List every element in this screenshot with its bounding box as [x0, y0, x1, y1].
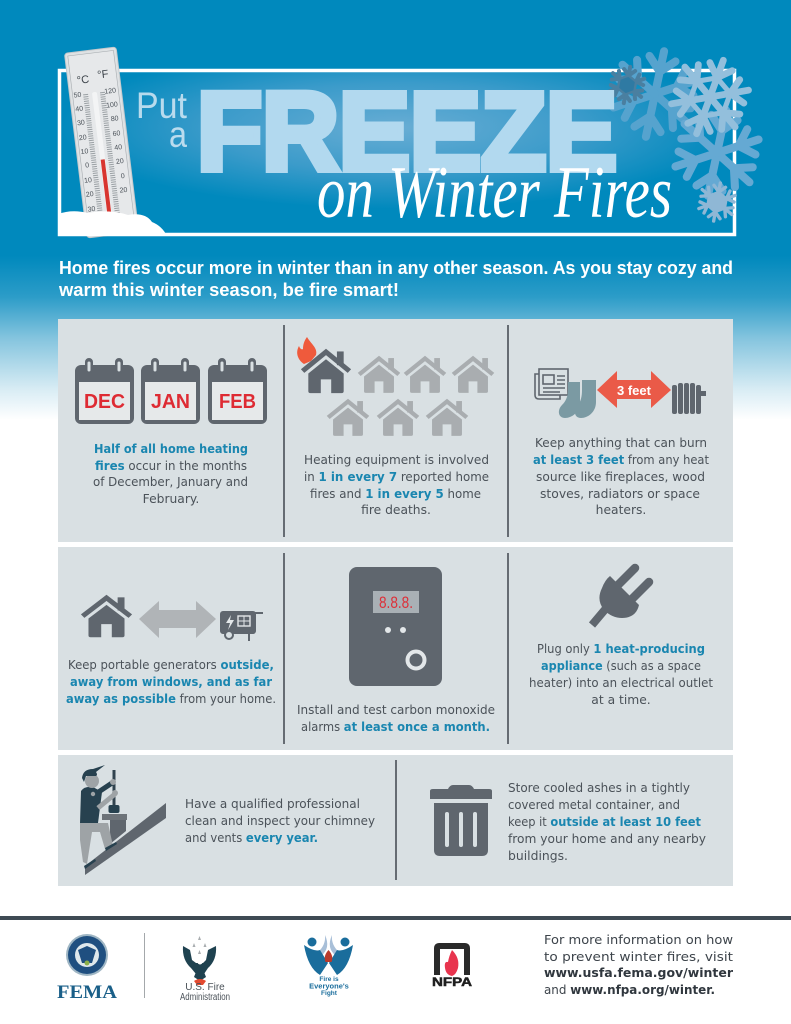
title: Put a: a — [169, 114, 187, 155]
text: heating months: of December, January and — [93, 475, 248, 489]
text: generators: Keep portable generators outside, — [68, 658, 274, 672]
icon: thermometer: 10 — [84, 177, 92, 185]
icon: calendars: FEB — [219, 391, 256, 413]
logo: U.S. Fire Administration: U.S. Fire — [185, 982, 225, 993]
panel: row 2 — [58, 547, 733, 750]
head and cap — [85, 774, 99, 788]
icon: house and generator — [83, 597, 263, 641]
icon: thermometer: 50 — [73, 92, 82, 100]
icon: plug — [592, 568, 649, 625]
footer text: For more information on how — [544, 933, 733, 947]
icon: thermometer: 20 — [85, 191, 94, 199]
text: ashes — [508, 781, 706, 863]
icon: calendars: JAN — [151, 391, 190, 413]
title: FREEZE: FREEZE — [197, 70, 617, 194]
icon: thermometer: °F — [97, 68, 109, 82]
icon: thermometer: 80 — [110, 115, 119, 123]
text: generators: away as possible from your home. — [66, 692, 276, 706]
title: Put a: Put — [136, 85, 188, 126]
torso — [80, 787, 102, 823]
banner frame — [60, 70, 734, 234]
text: alarms: Install and test carbon monoxide — [297, 703, 495, 717]
footer text: and www.nfpa.org/winter. — [544, 983, 715, 997]
roof — [85, 803, 166, 875]
icon: thermometer: 30 — [87, 206, 96, 214]
text: keep 3 feet — [533, 436, 709, 517]
icon: thermometer — [64, 47, 139, 238]
logo: U.S. Fire Administration: Administration — [180, 992, 230, 1003]
icon: three feet clearance: 3 feet — [617, 383, 652, 398]
intro heading — [58, 257, 733, 300]
footer bar — [0, 916, 791, 920]
logo: Fire is Everyone's Fight: Fight — [321, 990, 338, 997]
text: heating months — [93, 442, 248, 506]
icon: carbon monoxide alarm: 8.8.8. — [379, 593, 413, 612]
logo: Fire is Everyone's Fight: Everyone's — [309, 982, 349, 990]
text: plug: Plug only 1 heat-producing — [537, 642, 705, 656]
icon: thermometer: 40 — [114, 144, 123, 152]
text: ashes: from your home and any nearby — [508, 832, 706, 846]
text: heating equipment: in 1 in every 7 reported home — [304, 470, 489, 484]
icon: thermometer: 20 — [119, 187, 128, 195]
title: Put a — [136, 85, 188, 155]
panel: row 3 — [58, 755, 733, 886]
flame — [297, 337, 316, 364]
icon: thermometer: 0 — [85, 162, 90, 170]
text: heating months: February. — [143, 492, 199, 506]
icon: thermometer: 20 — [116, 158, 124, 166]
text: plug: heater) into an electrical outlet — [529, 676, 713, 690]
text: chimney: and vents every year. — [185, 831, 318, 845]
icon: trash can — [430, 785, 492, 856]
brush rod — [112, 770, 116, 808]
footer text: www.usfa.fema.gov/winter — [544, 966, 734, 980]
panel: row 1 — [58, 319, 733, 542]
text: generators — [66, 658, 276, 706]
icon: thermometer: 40 — [75, 106, 84, 113]
text: heating equipment — [304, 453, 489, 517]
text: alarms: alarms at least once a month. — [301, 720, 490, 734]
logo: FEMA — [57, 934, 117, 1003]
text: heating equipment: fire deaths. — [361, 503, 431, 517]
icon: thermometer: 100 — [106, 101, 118, 110]
newspaper — [535, 369, 568, 399]
text: keep 3 feet: source like fireplaces, wood — [536, 470, 705, 484]
icon: thermometer: 0 — [121, 173, 125, 180]
snow drift — [58, 211, 167, 236]
text: keep 3 feet: heaters. — [596, 503, 646, 517]
text: heating equipment: Heating equipment is involved — [304, 453, 489, 467]
logo: U.S. Fire Administration — [180, 936, 230, 1003]
legs — [80, 823, 113, 864]
logo: Fire is Everyone's Fight — [304, 935, 353, 997]
text: ashes: keep it outside at least 10 feet — [508, 815, 701, 829]
icon: three feet clearance — [535, 369, 706, 418]
text: plug: at a time. — [591, 693, 651, 707]
chimney — [110, 819, 126, 844]
text: chimney: Have a qualified professional — [185, 797, 360, 811]
logo: FEMA: FEMA — [57, 982, 117, 1003]
text: alarms — [297, 703, 495, 734]
text: chimney — [185, 797, 375, 845]
logo: Fire is Everyone's Fight: Fire is — [319, 976, 339, 983]
intro heading: warm this winter season, be fire smart! — [58, 279, 399, 300]
icon: chimney sweep on roof — [80, 765, 166, 875]
icon: thermometer: 120 — [104, 87, 117, 96]
text: keep 3 feet: stoves, radiators or space — [540, 487, 700, 501]
icon: calendars: DEC — [84, 391, 125, 413]
arrow — [597, 371, 671, 408]
footer text — [544, 933, 734, 997]
text: ashes: covered metal container, and — [508, 798, 680, 812]
icon: houses with fire — [297, 337, 493, 436]
text: chimney: clean and inspect your chimney — [185, 814, 375, 828]
intro heading: Home fires occur more in winter than in any other season. As you stay cozy and — [59, 257, 733, 278]
logo: NFPA: NFPA — [432, 975, 472, 989]
icon: thermometer: 20 — [79, 134, 87, 142]
icon: thermometer: 10 — [80, 148, 89, 156]
text: keep 3 feet: at least 3 feet from any heat — [533, 453, 709, 467]
logo: NFPA — [432, 946, 472, 989]
title: on Winter Fires: on Winter Fires — [317, 152, 672, 234]
header banner — [58, 42, 770, 238]
snowflakes — [602, 42, 770, 224]
text: heating equipment: fires and 1 in every 5 home — [310, 487, 481, 501]
banner glow — [60, 71, 734, 233]
arms — [94, 783, 112, 795]
icon: thermometer: 60 — [112, 130, 121, 138]
icon: thermometer: 30 — [77, 119, 85, 127]
text: heating months: Half of all home heating — [94, 442, 248, 456]
text: ashes: Store cooled ashes in a tightly — [508, 781, 690, 795]
text: keep 3 feet: Keep anything that can burn — [535, 436, 707, 450]
radiator — [672, 383, 706, 414]
icon: carbon monoxide alarm — [349, 567, 442, 686]
icon: calendars — [75, 362, 267, 424]
text: generators: away from windows, and as far — [70, 675, 273, 689]
icon: thermometer: °C — [76, 74, 90, 87]
text: plug — [529, 642, 713, 707]
socks — [559, 382, 580, 418]
text: plug: appliance (such as a space — [541, 659, 701, 673]
text: ashes: buildings. — [508, 849, 568, 863]
generator — [220, 611, 263, 641]
footer text: to prevent winter fires, visit — [544, 950, 733, 964]
text: heating months: fires occur in the months — [95, 459, 247, 473]
